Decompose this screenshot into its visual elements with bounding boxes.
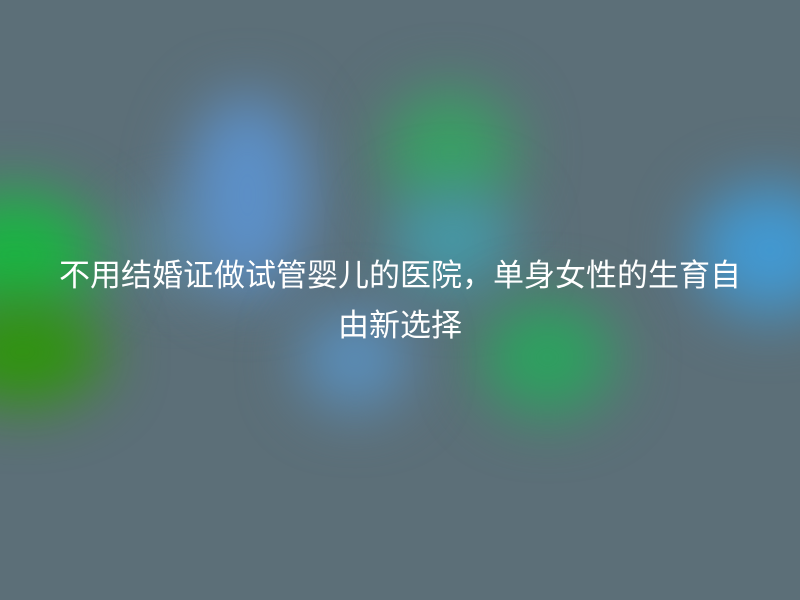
title: 不用结婚证做试管婴儿的医院，单身女性的生育自由新选择 [59, 258, 741, 343]
